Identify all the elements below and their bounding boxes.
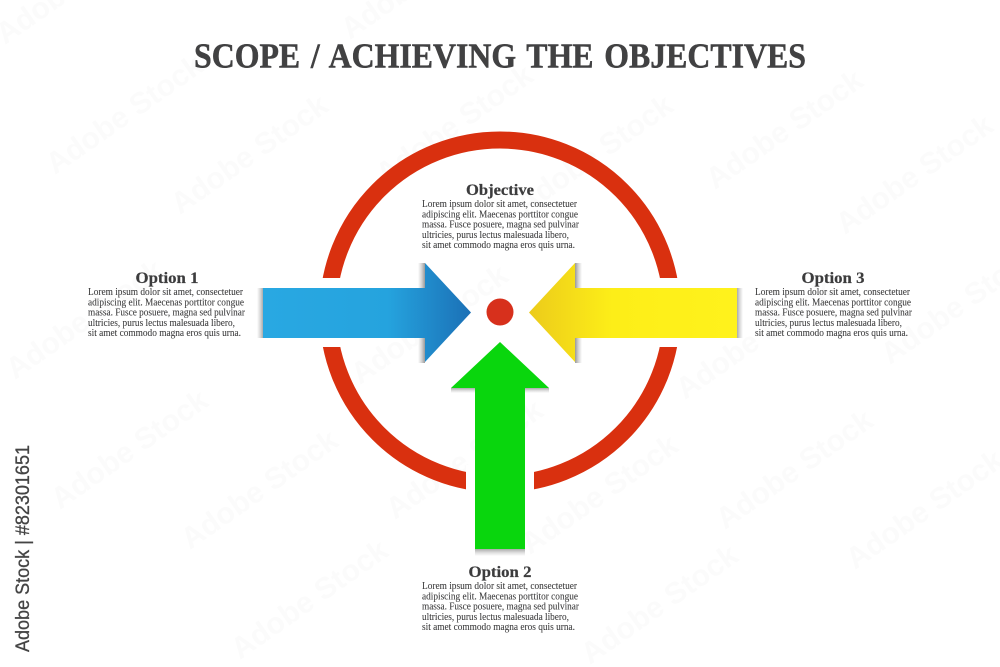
text block: option 1: sit amet commodo magna eros quis urna. <box>88 328 241 339</box>
watermark pattern: Adobe Stock <box>225 533 394 666</box>
text block: objective <box>422 182 580 251</box>
watermark pattern: Adobe Stock <box>345 258 514 391</box>
text block: objective: Objective <box>466 182 534 199</box>
text block: option 2: massa. Fusce posuere, magna sed pulvinar <box>422 602 580 613</box>
text block: option 1: massa. Fusce posuere, magna sed pulvinar <box>88 308 246 319</box>
text block: option 2: sit amet commodo magna eros quis urna. <box>422 622 575 633</box>
text block: option 2: adipiscing elit. Maecenas porttitor congue <box>422 591 579 602</box>
text block: option 3: massa. Fusce posuere, magna sed pulvinar <box>755 308 913 319</box>
watermark pattern: Adobe Stock <box>710 403 879 536</box>
watermark pattern: Adobe Stock <box>700 63 869 196</box>
text block: option 1: adipiscing elit. Maecenas porttitor congue <box>88 297 245 308</box>
text block: objective: massa. Fusce posuere, magna sed pulvinar <box>422 220 580 231</box>
text block: option 2: Option 2 <box>468 564 532 581</box>
text block: objective: Lorem ipsum dolor sit amet, consectetuer <box>422 199 578 210</box>
text block: option 1 <box>88 270 246 339</box>
watermark pattern: Adobe Stock <box>830 108 999 241</box>
watermark pattern: Adobe Stock <box>370 58 539 191</box>
text block: option 3: Lorem ipsum dolor sit amet, consectetuer <box>755 287 911 298</box>
text block: option 3: sit amet commodo magna eros quis urna. <box>755 328 908 339</box>
red target ring <box>300 140 700 510</box>
watermark pattern: Adobe Stock <box>0 253 169 386</box>
watermark pattern: Adobe Stock <box>670 273 839 406</box>
watermark pattern: Adobe Stock <box>575 538 744 667</box>
text block: option 2: ultricies, purus lectus malesuada libero, <box>422 612 569 623</box>
text block: option 2: Lorem ipsum dolor sit amet, consectetuer <box>422 581 578 592</box>
watermark pattern: Adobe Stock <box>165 88 334 221</box>
watermark pattern: Adobe Stock <box>45 383 214 516</box>
yellow arrow: option 3 <box>529 263 743 363</box>
text block: option 3: adipiscing elit. Maecenas porttitor congue <box>755 297 912 308</box>
title: SCOPE / ACHIEVING THE OBJECTIVES <box>194 36 806 76</box>
text block: option 3 <box>755 270 913 339</box>
text block: option 1: Option 1 <box>136 270 198 287</box>
watermark pattern: Adobe Stock <box>175 423 344 556</box>
watermark pattern: Adobe Stock <box>40 48 209 181</box>
text block: objective: sit amet commodo magna eros quis urna. <box>422 240 575 251</box>
text block: option 1: Lorem ipsum dolor sit amet, consectetuer <box>88 287 244 298</box>
watermark pattern: Adobe Stock <box>515 428 684 561</box>
text block: objective: adipiscing elit. Maecenas porttitor congue <box>422 209 579 220</box>
text block: option 3: Option 3 <box>802 270 865 287</box>
stock credit label: Adobe Stock | #82301651 <box>13 445 34 652</box>
blue arrow: option 1 <box>257 263 471 363</box>
watermark pattern: Adobe Stock <box>510 88 679 221</box>
green arrow: option 2 <box>451 342 549 556</box>
text block: option 2 <box>422 564 580 633</box>
center target dot <box>486 298 514 326</box>
watermark pattern: Adobe Stock <box>380 393 549 526</box>
text block: objective: ultricies, purus lectus malesuada libero, <box>422 230 569 241</box>
text block: option 3: ultricies, purus lectus malesuada libero, <box>755 318 902 329</box>
text block: option 1: ultricies, purus lectus malesuada libero, <box>88 318 235 329</box>
